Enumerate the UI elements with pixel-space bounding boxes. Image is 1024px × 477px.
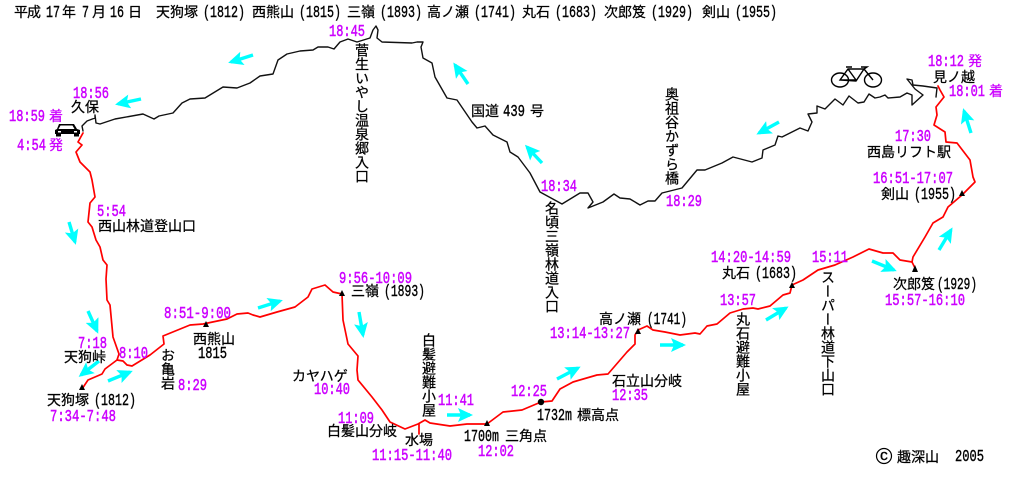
- label: Takanose 1741: 高ノ瀬: [599, 311, 641, 327]
- label: Minokoshi: 見ノ越: [933, 69, 975, 85]
- title: date and peak list: 17: [46, 4, 60, 23]
- title: date and peak list: 7: [82, 4, 89, 23]
- label: 1700m triangulation point: 1700m: [464, 428, 499, 447]
- label: Nishikuma 1815: 1815: [198, 345, 227, 364]
- time: 10:40: 10:40: [314, 381, 350, 400]
- label: Maruishi 1683: (1683): [755, 265, 797, 284]
- time: 18:56: 18:56: [73, 85, 109, 104]
- time: 16:51-17:07: 16:51-17:07: [873, 170, 953, 189]
- copyright credit: [876, 448, 984, 467]
- vertical label: Okame rock: お亀岩: [160, 348, 176, 390]
- time: 15:11: 15:11: [812, 249, 848, 268]
- label: Nishikuma 1815: [193, 331, 235, 364]
- title: date and peak list: (1812): [203, 4, 245, 23]
- label: Jirogyu 1929: [893, 276, 977, 295]
- label: Ishidateyama junction: 石立山分岐: [612, 373, 682, 389]
- copyright credit: 趣深山: [897, 449, 939, 465]
- title: date and peak list: 平成: [14, 4, 41, 20]
- title: date and peak list: (1741): [474, 4, 516, 23]
- time: 18:34: 18:34: [541, 178, 577, 197]
- title: date and peak list: 年: [62, 4, 76, 20]
- label: Route 439: 国道: [471, 103, 499, 119]
- title: date and peak list: 三嶺: [347, 4, 375, 20]
- icon: bicycle: [832, 67, 882, 87]
- title: date and peak list: [14, 4, 777, 23]
- time: 13:14-13:27: 13:14-13:27: [550, 325, 630, 344]
- time: 12:25: 12:25: [511, 383, 547, 402]
- vertical label: Okuiya Kazura Bridge: 奥祖谷かずら橋: [664, 87, 680, 185]
- time: 13:57: 13:57: [720, 292, 756, 311]
- label: Route 439: 号: [530, 103, 544, 119]
- time: 12:02: 12:02: [478, 443, 514, 462]
- red line: hiking trail: [76, 86, 975, 434]
- label: 1700m triangulation point: [464, 428, 547, 447]
- time: 11:41: 11:41: [438, 392, 474, 411]
- vertical label: Super forest road trail exit: スーパー林道下山口: [820, 270, 836, 396]
- label: Route 439: [471, 103, 544, 122]
- label: water source: 水場: [405, 432, 433, 448]
- time: 18:29: 18:29: [666, 193, 702, 212]
- title: date and peak list: (1815): [299, 4, 341, 23]
- label: Nishijima lift station: 西島リフト駅: [867, 144, 951, 160]
- label: 1732m spot height: [537, 407, 619, 426]
- vertical label: Shiraga refuge hut: 白髪避難小屋: [421, 333, 437, 418]
- time: 17:30: 17:30: [895, 128, 931, 147]
- label: Kayahage: カヤハゲ: [292, 368, 348, 384]
- title: date and peak list: 16: [110, 4, 124, 23]
- title: date and peak list: 次郎笈: [604, 4, 646, 20]
- time: 14:20-14:59: 14:20-14:59: [711, 249, 791, 268]
- label: Tsurugi 1955: 剣山: [881, 186, 909, 202]
- vertical label: Sugeoi Iyashi Onsenkyo entrance: 菅生いやし温泉郷入口: [354, 43, 370, 183]
- black line: road cycled back to Kubo: [82, 26, 937, 208]
- title: date and peak list: (1893): [380, 4, 422, 23]
- label: Jirogyu 1929: 次郎笈: [893, 276, 935, 292]
- icon: car: [55, 124, 80, 136]
- time: 18:59 arrival: 着: [49, 108, 63, 124]
- title: date and peak list: 高ノ瀬: [427, 4, 469, 20]
- time: 12:35: 12:35: [612, 387, 648, 406]
- label: Nishikuma 1815: 西熊山: [193, 331, 235, 347]
- vertical label: Nagoro Sanrei forest road entrance: 名頃三嶺林道入口: [544, 201, 560, 313]
- vertical label: Maruishi refuge hut: 丸石避難小屋: [735, 312, 751, 397]
- label: Maruishi 1683: [722, 265, 797, 284]
- label: Sanrei 1893: (1893): [384, 283, 425, 302]
- label: Tenguzuka 1812: 天狗塚: [47, 392, 89, 408]
- time: 4:54 departure: 発: [49, 137, 63, 153]
- title: date and peak list: 日: [128, 4, 142, 20]
- time: 11:09: 11:09: [338, 410, 374, 429]
- time: 4:54 departure: 4:54: [17, 137, 46, 156]
- label: Takanose 1741: (1741): [647, 311, 687, 330]
- time: 18:45: 18:45: [329, 23, 365, 42]
- label: Jirogyu 1929: (1929): [937, 276, 977, 295]
- title: date and peak list: 西熊山: [252, 4, 294, 20]
- marker: 1732m point: [538, 399, 544, 405]
- label: Tsurugi 1955: [881, 186, 956, 205]
- copyright credit: C: [880, 450, 888, 464]
- label: Sanrei 1893: 三嶺: [351, 283, 379, 299]
- title: date and peak list: (1955): [735, 4, 777, 23]
- label: Tenguzuka 1812: (1812): [94, 392, 136, 411]
- label: 1732m spot height: 1732m: [537, 407, 572, 426]
- label: Tenguzuka 1812: [47, 392, 136, 411]
- peak marker triangles: [79, 190, 965, 426]
- label: Route 439: 439: [503, 103, 525, 122]
- title: date and peak list: 月: [92, 4, 106, 20]
- label: Maruishi 1683: 丸石: [722, 265, 750, 281]
- time: 18:59 arrival: 18:59: [9, 108, 45, 127]
- time: 18:01 arrival: 着: [989, 83, 1003, 99]
- label: 1732m spot height: 標高点: [577, 407, 619, 423]
- time: 7:34-7:48: 7:34-7:48: [50, 408, 116, 427]
- label: Tengu pass: 天狗峠: [64, 349, 106, 365]
- label: Tsurugi 1955: (1955): [914, 186, 956, 205]
- time: 18:01 arrival: 18:01: [949, 83, 985, 102]
- copyright credit: 2005: [955, 448, 984, 467]
- time: 11:15-11:40: 11:15-11:40: [372, 447, 452, 466]
- time: 5:54: 5:54: [97, 203, 126, 222]
- direction arrows: [69, 55, 971, 415]
- time: 18:12 departure: 18:12: [928, 53, 964, 72]
- title: date and peak list: 剣山: [702, 4, 730, 20]
- title: date and peak list: 天狗塚: [156, 4, 198, 20]
- label: Nishiyama forest road trailhead: 西山林道登山口: [98, 218, 196, 234]
- label: 1700m triangulation point: 三角点: [505, 428, 547, 444]
- label: Sanrei 1893: [351, 283, 425, 302]
- time: 9:56-10:09: 9:56-10:09: [339, 270, 412, 289]
- label: Shiragayama junction: 白髪山分岐: [327, 423, 397, 439]
- time: 8:51-9:00: 8:51-9:00: [164, 305, 231, 324]
- time: 8:29: 8:29: [178, 377, 207, 396]
- time: 8:10: 8:10: [119, 345, 148, 364]
- title: date and peak list: (1683): [555, 4, 597, 23]
- time: 7:18: 7:18: [78, 335, 107, 354]
- title: date and peak list: (1929): [651, 4, 693, 23]
- label: Kubo: 久保: [71, 99, 99, 115]
- title: date and peak list: 丸石: [522, 4, 550, 20]
- time: 18:12 departure: 発: [968, 53, 982, 69]
- time: 15:57-16:10: 15:57-16:10: [885, 292, 965, 311]
- label: Takanose 1741: [599, 311, 687, 330]
